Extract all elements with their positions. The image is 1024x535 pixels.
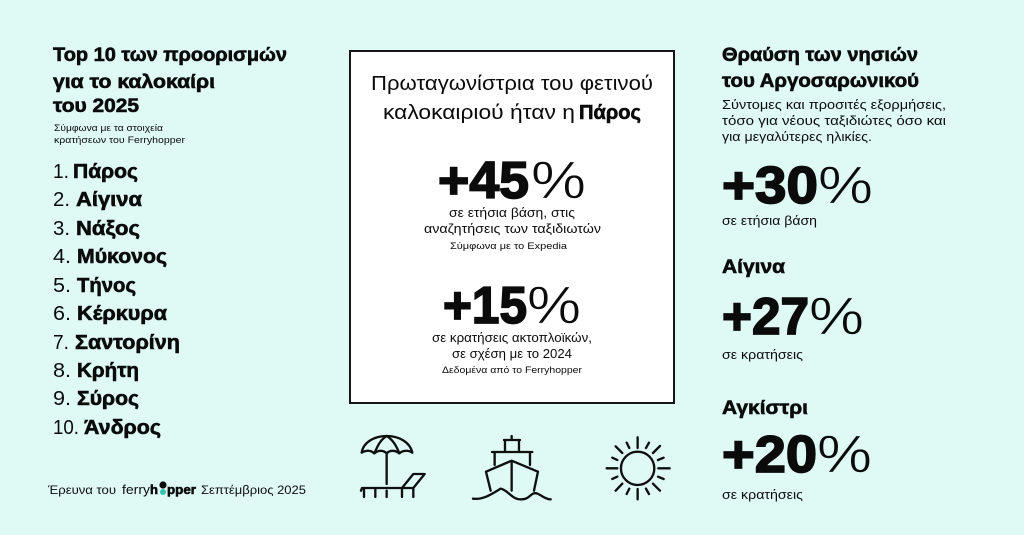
panel heading bbox=[371, 73, 653, 124]
ranked list: Μύκονος bbox=[77, 246, 167, 268]
caption: +15%: σε σχέση με το 2024 bbox=[452, 347, 572, 361]
stat: +20% bbox=[722, 425, 872, 484]
caption: +27%: σε κρατήσεις bbox=[722, 348, 803, 362]
stat: +30%: +30 bbox=[722, 157, 818, 215]
ranked list: 10. bbox=[53, 417, 79, 439]
footer: survey credit with logo: h bbox=[150, 482, 158, 497]
ranked list: Άνδρος bbox=[84, 417, 161, 439]
heading: top 10: για το καλοκαίρι bbox=[53, 72, 215, 93]
ranked list: Πάρος bbox=[73, 161, 138, 183]
footer: survey credit with logo: Σεπτέμβριος 2025 bbox=[201, 483, 306, 497]
ranked list bbox=[53, 161, 180, 439]
stat: +27%: +27 bbox=[722, 288, 809, 346]
intro text: τόσο για νέους ταξιδιώτες όσο και bbox=[722, 114, 946, 128]
icon: sun bbox=[607, 437, 670, 499]
panel heading: καλοκαιριού ήταν η bbox=[383, 102, 575, 124]
left column: top 10 destinations bbox=[53, 45, 287, 439]
heading: Argosaronic bbox=[722, 45, 919, 92]
footer: survey credit with logo: Έρευνα του bbox=[47, 483, 116, 497]
source note: κρατήσεων του Ferryhopper bbox=[54, 135, 185, 146]
caption: +45% bbox=[424, 206, 601, 252]
icon: ship on waves bbox=[473, 436, 551, 499]
heading: Argosaronic: του Αργοσαρωνικού bbox=[722, 71, 919, 92]
source note: Σύμφωνα με τα στοιχεία bbox=[54, 123, 164, 134]
ranked list: 6. bbox=[53, 303, 71, 325]
heading: top 10 bbox=[53, 45, 287, 117]
icon: beach umbrella and lounger bbox=[361, 436, 425, 497]
ranked list: 9. bbox=[53, 388, 71, 410]
ranked list: Αίγινα bbox=[76, 189, 143, 211]
ranked list: 5. bbox=[53, 275, 71, 297]
heading: top 10: Top 10 των προορισμών bbox=[53, 45, 287, 66]
stat: +15%: % bbox=[527, 276, 581, 335]
caption: +45%: αναζητήσεις των ταξιδιωτών bbox=[424, 222, 601, 236]
ranked list: 2. bbox=[53, 189, 70, 211]
heading: Aegina: Αίγινα bbox=[722, 257, 785, 278]
intro text: Σύντομες και προσιτές εξορμήσεις, bbox=[722, 98, 946, 112]
stat: +27%: % bbox=[809, 287, 864, 346]
ranked list: Νάξος bbox=[76, 218, 140, 240]
caption: +15% bbox=[432, 331, 592, 376]
ranked list: Κρήτη bbox=[77, 360, 139, 382]
caption: +15%: Δεδομένα από το Ferryhopper bbox=[442, 365, 582, 376]
caption: +20%: σε κρατήσεις bbox=[722, 488, 803, 502]
stat: +15%: +15 bbox=[443, 277, 527, 335]
ranked list: Σύρος bbox=[77, 388, 139, 410]
intro text: για μεγαλύτερες ηλικίες. bbox=[722, 130, 872, 144]
right column: Argosaronic islands bbox=[722, 45, 946, 502]
ranked list: Κέρκυρα bbox=[77, 303, 168, 325]
stat: +30%: % bbox=[818, 156, 873, 215]
heading: Agistri: Αγκίστρι bbox=[722, 398, 808, 419]
caption: +30%: σε ετήσια βάση bbox=[722, 214, 817, 228]
panel: Paros highlight bbox=[350, 51, 674, 403]
intro text bbox=[722, 98, 946, 144]
ranked list: 7. bbox=[53, 332, 69, 354]
caption: +15%: σε κρατήσεις ακτοπλοϊκών, bbox=[432, 331, 592, 345]
heading: Argosaronic: Θραύση των νησιών bbox=[722, 45, 918, 66]
ranked list: 8. bbox=[53, 360, 71, 382]
stat: +30% bbox=[722, 156, 873, 215]
stat: +45% bbox=[438, 151, 586, 210]
footer: survey credit with logo: pper bbox=[167, 482, 196, 497]
stat: +20%: % bbox=[817, 425, 872, 484]
footer: survey credit with logo: ferry bbox=[122, 482, 151, 497]
panel heading: Πρωταγωνίστρια του φετινού bbox=[371, 73, 653, 95]
ranked list: Σαντορίνη bbox=[75, 332, 180, 354]
stat: +15% bbox=[443, 276, 581, 335]
ranked list: 4. bbox=[53, 246, 71, 268]
source note bbox=[54, 123, 185, 146]
stat: +20%: +20 bbox=[722, 426, 817, 484]
caption: +45%: σε ετήσια βάση, στις bbox=[449, 206, 575, 220]
stat: +45%: % bbox=[531, 151, 586, 210]
heading: top 10: του 2025 bbox=[53, 96, 139, 117]
caption: +45%: Σύμφωνα με το Expedia bbox=[450, 241, 568, 252]
panel heading: Πάρος bbox=[579, 102, 641, 124]
stat: +27% bbox=[722, 287, 864, 346]
stat: +45%: +45 bbox=[438, 152, 529, 210]
ranked list: 1. bbox=[53, 161, 69, 183]
ranked list: 3. bbox=[53, 218, 70, 240]
footer: survey credit with logo bbox=[47, 481, 306, 497]
ranked list: Τήνος bbox=[77, 275, 136, 297]
